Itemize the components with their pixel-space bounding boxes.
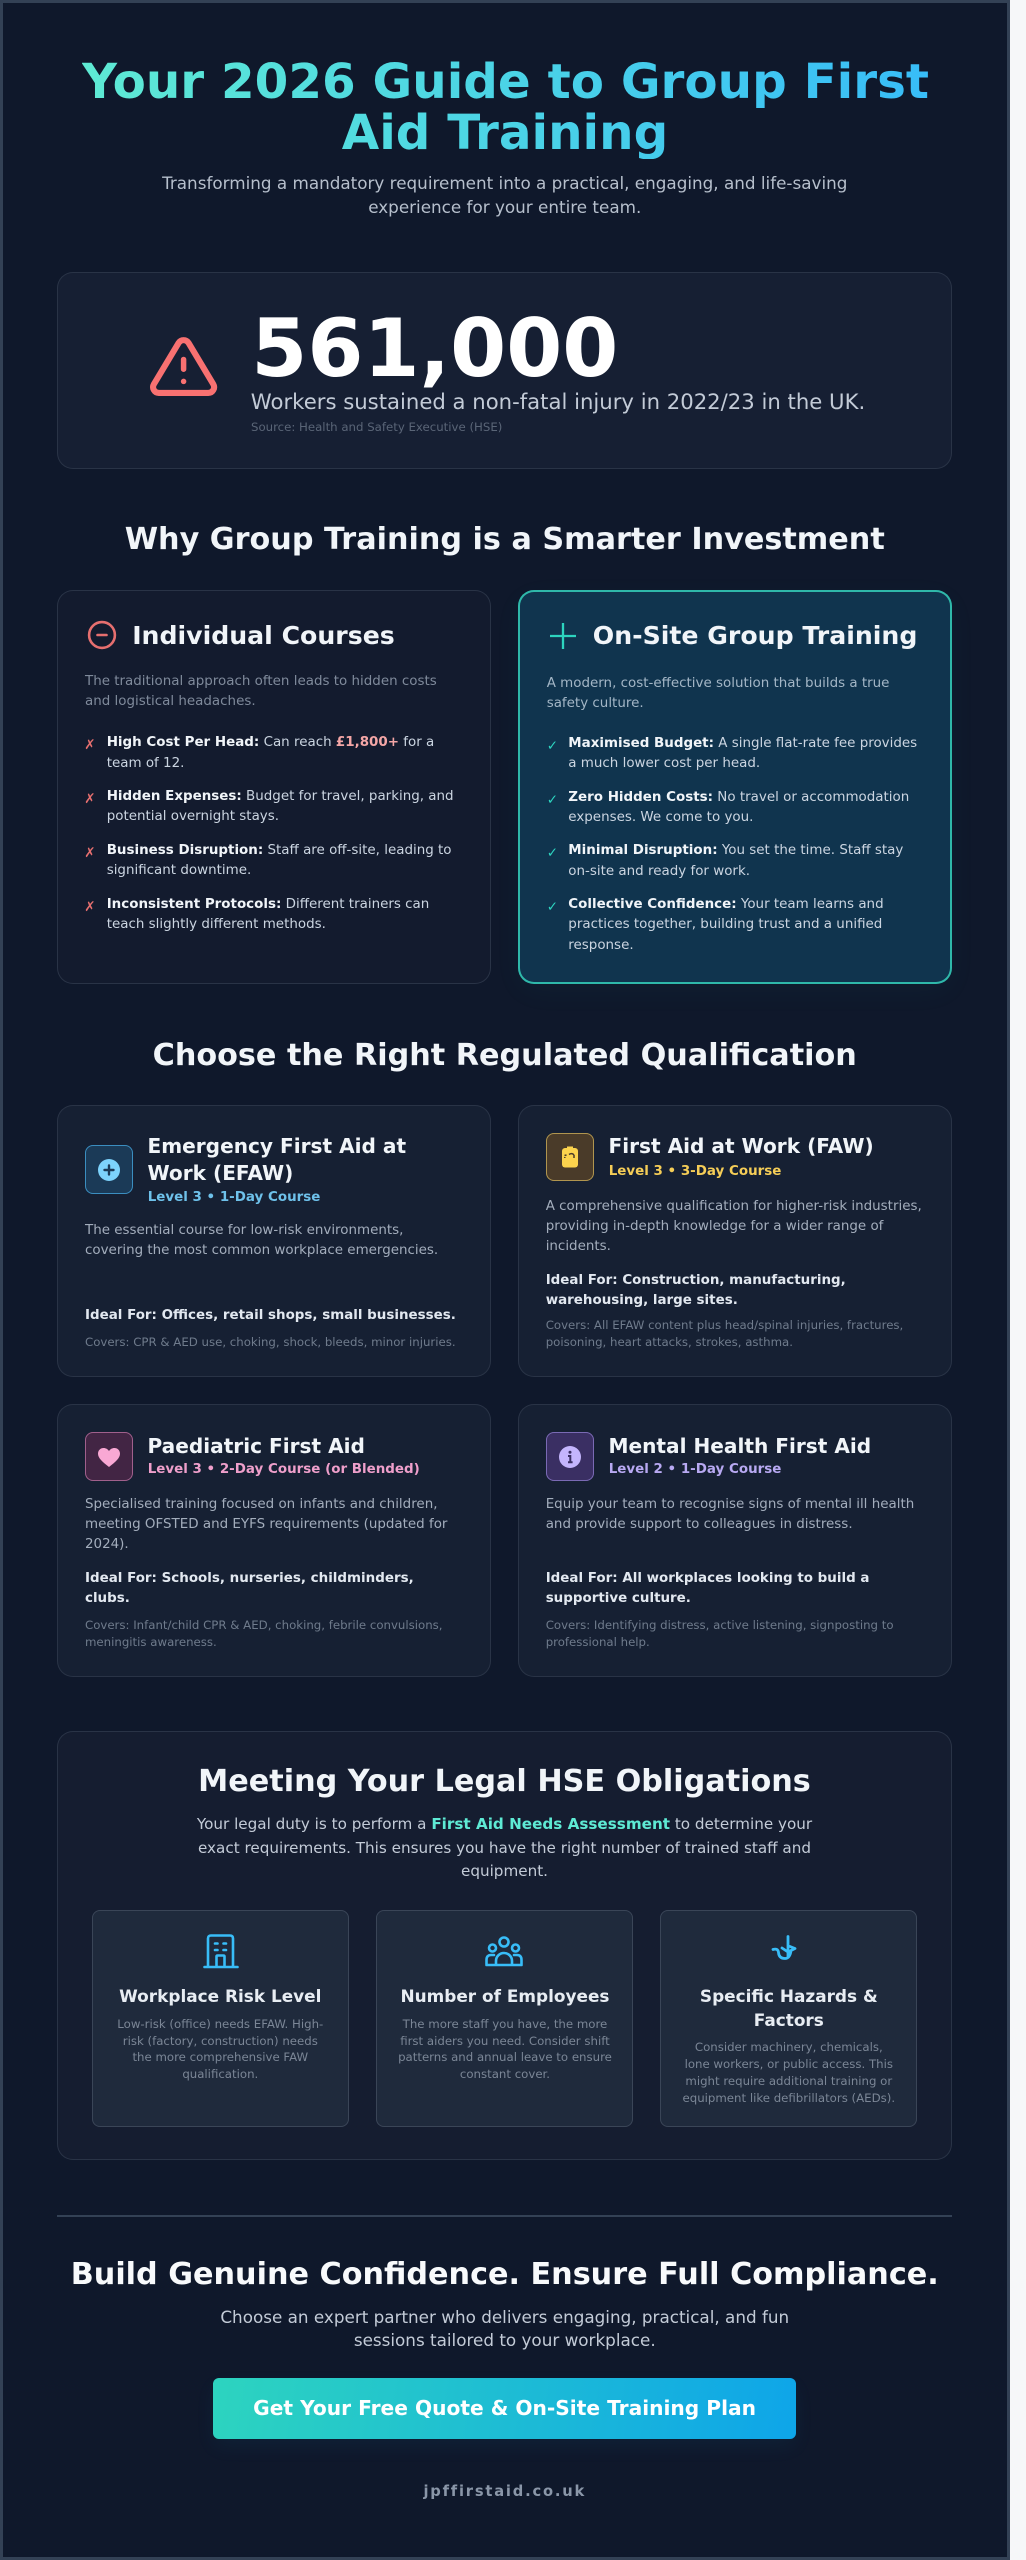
list item: Inconsistent Protocols: Different trainers can [107, 897, 429, 912]
icon: plus circle [85, 1145, 133, 1194]
list item: ✓ [547, 900, 558, 915]
title [82, 57, 928, 159]
card title: Factors [754, 2010, 824, 2030]
ideal for [546, 1273, 846, 1308]
icon: hazard [772, 1935, 796, 1960]
intro text: Your legal duty is to perform a First Aid Needs Assessment to determine your [197, 1815, 812, 1833]
ideal for: Ideal For: Construction, manufacturing, [546, 1273, 846, 1288]
description: The essential course for low-risk environments, [85, 1223, 403, 1238]
panel: individual courses [57, 590, 491, 984]
list item: expenses. We come to you. [568, 810, 753, 825]
icon: plus [550, 623, 576, 649]
card text: first aiders you need. Consider shift [400, 2034, 610, 2048]
ideal for [546, 1571, 869, 1606]
divider [57, 2215, 952, 2217]
ideal for: clubs. [85, 1591, 130, 1606]
course title: First Aid at Work (FAW) [608, 1134, 874, 1158]
description: A comprehensive qualification for higher-risk industries, [546, 1199, 922, 1214]
list item: ✗ [84, 792, 96, 807]
icon: info circle [546, 1432, 594, 1481]
list item: ✓ [547, 846, 558, 861]
list item: a much lower cost per head. [568, 756, 760, 771]
card text [682, 2040, 895, 2105]
icon: warning triangle [150, 337, 218, 396]
description: Equip your team to recognise signs of mental ill health [546, 1497, 914, 1512]
website address: jpffirstaid.co.uk [423, 2482, 586, 2500]
card text: lone workers, or public access. This [685, 2057, 893, 2071]
list item: practices together, building trust and a unified [568, 917, 882, 932]
list item: team of 12. [107, 756, 184, 771]
card text: constant cover. [460, 2067, 550, 2081]
covers: poisoning, heart attacks, strokes, asthma. [546, 1335, 793, 1349]
card text: risk (factory, construction) needs [123, 2034, 318, 2048]
panel: key statistic [57, 272, 952, 469]
button [213, 2378, 796, 2439]
icon: first aid kit [546, 1133, 594, 1181]
covers [85, 1618, 442, 1649]
list item [84, 897, 429, 932]
card: number of employees [376, 1910, 633, 2127]
covers: Covers: Infant/child CPR & AED, choking, febrile convulsions, [85, 1618, 442, 1632]
card: workplace risk level [92, 1910, 349, 2127]
statistic description: Workers sustained a non-fatal injury in 2022/23 in the UK. [251, 389, 865, 414]
covers [546, 1618, 894, 1649]
call to action text [220, 2306, 789, 2350]
panel: on-site group training [518, 590, 952, 984]
description: meeting OFSTED and EYFS requirements (updated for [85, 1517, 447, 1532]
list item [84, 843, 452, 878]
list item: ✗ [84, 846, 96, 861]
course title: Paediatric First Aid [147, 1434, 365, 1458]
list item [547, 736, 917, 771]
card text: the more comprehensive FAW [132, 2050, 308, 2064]
subtitle: Transforming a mandatory requirement into a practical, engaging, and life-saving [162, 173, 847, 193]
list item: Collective Confidence: Your team learns and [568, 897, 884, 912]
course level: Level 3 • 1-Day Course [148, 1190, 320, 1205]
source: Source: Health and Safety Executive (HSE) [251, 420, 502, 434]
course level: Level 3 • 3-Day Course [609, 1164, 781, 1179]
heading: On-Site Group Training [593, 621, 917, 650]
list item: Hidden Expenses: Budget for travel, parking, and [107, 789, 454, 804]
covers: Covers: All EFAW content plus head/spinal injuries, fractures, [546, 1318, 903, 1332]
ideal for: warehousing, large sites. [546, 1293, 738, 1308]
icon: minus circle [88, 620, 116, 650]
card text: might require additional training or [685, 2074, 892, 2088]
card text: patterns and annual leave to ensure [398, 2050, 612, 2064]
card title: Specific Hazards & [700, 1986, 878, 2006]
card text: qualification. [182, 2067, 258, 2081]
icon: building [203, 1934, 239, 1968]
heading: why group training: Why Group Training is a Smarter Investment [125, 522, 885, 557]
course level: Level 3 • 2-Day Course (or Blended) [148, 1462, 420, 1477]
card title: Number of Employees [400, 1986, 609, 2006]
card title: Workplace Risk Level [119, 1986, 321, 2006]
title: Aid Training [342, 105, 668, 161]
ideal for: supportive culture. [546, 1591, 691, 1606]
course title [147, 1134, 406, 1185]
list item [547, 843, 903, 879]
icon: heart [85, 1432, 133, 1481]
list item: Business Disruption: Staff are off-site, leading to [107, 843, 452, 858]
course title: Emergency First Aid at [147, 1134, 406, 1158]
call to action text: sessions tailored to your workplace. [354, 2330, 656, 2350]
list item: ✗ [84, 738, 96, 753]
list item: on-site and ready for work. [568, 864, 750, 879]
panel: EFAW course [57, 1105, 491, 1377]
list item: Zero Hidden Costs: No travel or accommodation [568, 790, 909, 805]
description: providing in-depth knowledge for a wider range of [546, 1219, 883, 1234]
intro text [84, 674, 437, 709]
course level: Level 2 • 1-Day Course [609, 1462, 781, 1477]
subtitle: experience for your entire team. [368, 197, 641, 217]
list item: Maximised Budget: A single flat-rate fee provides [568, 736, 917, 751]
intro text [546, 676, 889, 711]
covers: professional help. [546, 1635, 650, 1649]
list item [84, 789, 454, 824]
heading: choose qualification: Choose the Right Regulated Qualification [153, 1038, 857, 1073]
ideal for: Ideal For: Offices, retail shops, small businesses. [85, 1308, 456, 1323]
list item: potential overnight stays. [107, 809, 279, 824]
panel: paediatric course [57, 1404, 491, 1677]
intro text: A modern, cost-effective solution that builds a true [547, 676, 889, 690]
course title: Work (EFAW) [147, 1161, 293, 1185]
heading: Individual Courses [132, 621, 395, 650]
description: 2024). [85, 1537, 129, 1552]
description [84, 1223, 438, 1258]
description [85, 1497, 448, 1552]
list item: Minimal Disruption: You set the time. Staff stay [568, 843, 903, 858]
big number: 561,000 [251, 302, 618, 396]
list item: High Cost Per Head: Can reach £1,800+ for a [107, 735, 434, 750]
list item [547, 897, 884, 953]
intro text: The traditional approach often leads to hidden costs [85, 674, 437, 688]
title: Your 2026 Guide to Group First [82, 54, 929, 110]
ideal for [85, 1571, 414, 1606]
subtitle [162, 173, 847, 217]
intro text: and logistical headaches. [85, 694, 256, 709]
list item: ✓ [547, 739, 558, 754]
heading: Meeting Your Legal HSE Obligations [198, 1764, 811, 1799]
covers [546, 1318, 903, 1349]
call to action text: Choose an expert partner who delivers engaging, practical, and fun [220, 2306, 789, 2326]
list item [84, 735, 434, 771]
heading: call to action: Build Genuine Confidence. Ensure Full Compliance. [71, 2257, 939, 2292]
list item: ✗ [84, 900, 96, 915]
covers: meningitis awareness. [85, 1635, 217, 1649]
panel: mental health course [518, 1404, 952, 1677]
card: specific hazards [660, 1910, 917, 2127]
description: covering the most common workplace emergencies. [85, 1243, 438, 1258]
card text: The more staff you have, the more [403, 2017, 607, 2031]
covers: Covers: Identifying distress, active listening, signposting to [546, 1618, 894, 1632]
description: Specialised training focused on infants and children, [85, 1497, 437, 1512]
description [546, 1199, 922, 1254]
card text [117, 2017, 323, 2081]
icon: people [485, 1936, 523, 1966]
ideal for: Ideal For: All workplaces looking to build a [546, 1571, 869, 1586]
list item: response. [568, 938, 634, 953]
card text: Low-risk (office) needs EFAW. High- [117, 2017, 323, 2031]
ideal for: Ideal For: Schools, nurseries, childminders, [85, 1571, 414, 1586]
card title [700, 1986, 878, 2030]
button: Get Your Free Quote & On-Site Training Plan [253, 2396, 756, 2420]
intro text [196, 1815, 812, 1880]
list item: teach slightly different methods. [107, 917, 326, 932]
panel: FAW course [518, 1105, 952, 1377]
panel: legal HSE obligations [57, 1731, 952, 2160]
intro text: equipment. [461, 1862, 548, 1880]
description [546, 1497, 914, 1532]
card text [398, 2017, 612, 2081]
intro text: safety culture. [547, 696, 644, 711]
description: incidents. [546, 1239, 611, 1254]
course title: Mental Health First Aid [608, 1434, 871, 1458]
covers: Covers: CPR & AED use, choking, shock, bleeds, minor injuries. [85, 1335, 456, 1349]
list item [547, 790, 909, 825]
card text: Consider machinery, chemicals, [695, 2040, 883, 2054]
list item: significant downtime. [107, 863, 251, 878]
card text: equipment like defibrillators (AEDs). [682, 2091, 895, 2105]
description: and provide support to colleagues in distress. [546, 1517, 853, 1532]
list item: ✓ [547, 793, 558, 808]
intro text: exact requirements. This ensures you have the right number of trained staff and [198, 1839, 811, 1857]
